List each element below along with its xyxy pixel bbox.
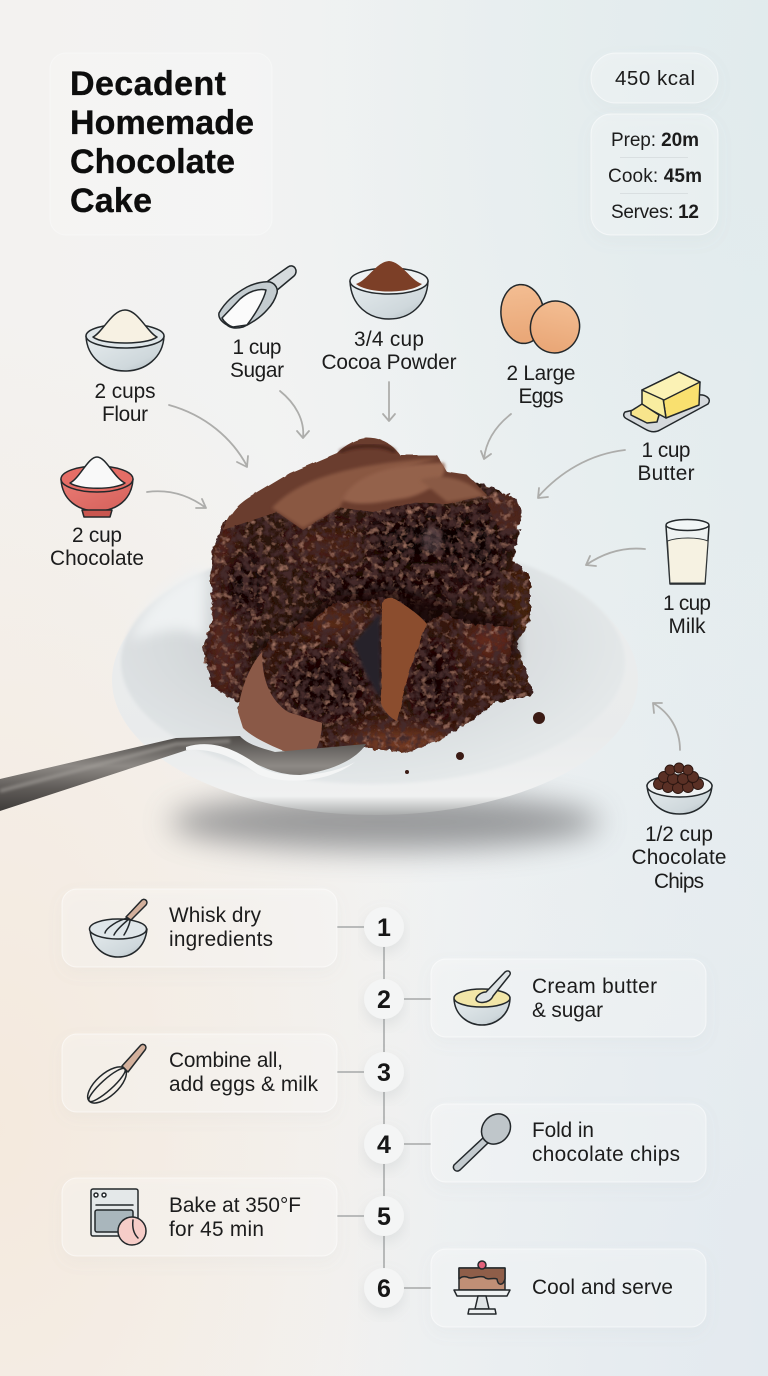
arrow: cocoa to cake xyxy=(383,382,395,421)
icon: two eggs xyxy=(498,282,584,358)
step number 6 xyxy=(364,1268,404,1308)
ingredient: flour: Flour xyxy=(102,403,148,426)
step 5 card: Bake at 350°F xyxy=(169,1194,301,1217)
step number 2 xyxy=(364,979,404,1019)
ingredient: chocolate chips xyxy=(632,763,726,893)
shadow behind bite xyxy=(255,590,515,720)
step 3 card: add eggs & milk xyxy=(169,1073,319,1096)
step 4 card xyxy=(431,1104,706,1182)
icon: whisk in bowl xyxy=(90,899,147,957)
frosting swirl xyxy=(272,458,438,528)
ingredient: chocolate: Chocolate xyxy=(50,547,144,570)
step 2 card: Cream butter xyxy=(532,975,657,998)
crumb highlight xyxy=(422,527,442,553)
arrow: chips to cake xyxy=(653,703,680,750)
icon: bowl of chips xyxy=(647,763,712,814)
step 3 card xyxy=(62,1034,337,1112)
step 3 card: Combine all, xyxy=(169,1049,283,1072)
step number 2: 2 xyxy=(377,986,391,1014)
plate shadow xyxy=(170,794,600,850)
ingredient: chocolate chips: Chocolate xyxy=(632,846,726,869)
arrow: butter to cake xyxy=(538,450,625,498)
icon: spoon xyxy=(453,1108,516,1171)
icon: whisk xyxy=(82,1044,146,1109)
ingredient: chocolate: 2 cup xyxy=(72,524,122,547)
step 6 card xyxy=(431,1249,706,1327)
step 4 card: Fold in xyxy=(532,1119,594,1142)
ingredient: chocolate chips: Chips xyxy=(654,870,704,893)
ingredient: flour: 2 cups xyxy=(94,380,156,403)
icon: sugar scoop xyxy=(219,266,296,328)
ingredient: sugar: Sugar xyxy=(230,359,284,382)
ingredient: chocolate xyxy=(50,457,144,570)
step 2 card: & sugar xyxy=(532,999,603,1022)
frosting top xyxy=(223,438,487,530)
arrow: flour to cake xyxy=(169,405,248,467)
recipe stats panel: Serves: 12 xyxy=(611,202,699,223)
step 6 card: Cool and serve xyxy=(532,1276,673,1299)
calories pill xyxy=(591,53,718,103)
arrow: chocolate to cake xyxy=(147,491,206,508)
fork bite body xyxy=(238,598,515,760)
ingredient: milk: 1 cup xyxy=(663,592,711,615)
recipe stats panel: Prep: 20m xyxy=(611,130,699,151)
ingredient: butter xyxy=(624,372,709,485)
ingredient: butter: Butter xyxy=(638,462,695,485)
ingredient: eggs: 2 Large xyxy=(506,362,576,385)
title panel: Decadent xyxy=(70,65,226,103)
bite caramel layer xyxy=(381,598,427,721)
ingredient: sugar: 1 cup xyxy=(232,336,282,359)
ingredient: eggs: Eggs xyxy=(518,385,564,408)
bite dark layer xyxy=(353,613,381,700)
arrow: eggs to cake xyxy=(481,414,511,459)
ingredient: sugar xyxy=(219,266,296,382)
step 2 card xyxy=(431,959,706,1037)
step number 4: 4 xyxy=(377,1131,391,1159)
crumbs xyxy=(405,712,545,774)
bite frosting side xyxy=(238,652,322,760)
step 1 card: Whisk dry xyxy=(169,904,262,927)
title panel: Cake xyxy=(70,182,152,220)
step number 6: 6 xyxy=(377,1275,391,1303)
timeline connectors xyxy=(337,927,431,1288)
step number 1 xyxy=(364,907,404,947)
step number 5: 5 xyxy=(377,1203,391,1231)
ingredient: milk xyxy=(663,520,711,638)
step number 1: 1 xyxy=(377,914,391,942)
ingredient: milk: Milk xyxy=(668,615,706,638)
title panel xyxy=(50,53,272,235)
step number 3: 3 xyxy=(377,1059,391,1087)
icon: bowl with spoon xyxy=(454,971,510,1025)
ingredient: flour xyxy=(86,310,164,426)
step 5 card: for 45 min xyxy=(169,1218,264,1241)
step 4 card: chocolate chips xyxy=(532,1143,680,1166)
icon: cocoa bowl xyxy=(350,261,428,319)
step number 4 xyxy=(364,1124,404,1164)
step 1 card xyxy=(62,889,337,967)
step 5 card xyxy=(62,1178,337,1256)
icon: cake on stand xyxy=(454,1261,510,1314)
knob on cake corner xyxy=(487,493,521,532)
plate xyxy=(112,540,638,815)
step number 3 xyxy=(364,1052,404,1092)
step number 5 xyxy=(364,1196,404,1236)
cake slice xyxy=(203,438,545,774)
arrow: sugar to cake xyxy=(280,391,309,438)
cake body xyxy=(203,470,540,705)
ingredient: cocoa powder: Cocoa Powder xyxy=(322,351,457,374)
ingredient: cocoa powder xyxy=(322,261,457,374)
arrow: milk to cake xyxy=(586,549,645,566)
icon: flour bowl xyxy=(86,310,164,371)
ingredient: chocolate chips: 1/2 cup xyxy=(645,823,713,846)
title panel: Homemade xyxy=(70,104,254,142)
fork xyxy=(0,736,366,811)
ingredient: eggs xyxy=(498,282,584,408)
ingredient: butter: 1 cup xyxy=(642,439,690,462)
icon: oven with timer xyxy=(91,1189,146,1245)
recipe stats panel: Cook: 45m xyxy=(608,166,702,187)
ingredient: cocoa powder: 3/4 cup xyxy=(354,328,424,351)
calories pill: 450 kcal xyxy=(615,67,695,90)
title panel: Chocolate xyxy=(70,143,235,181)
icon: butter on dish xyxy=(624,372,709,432)
recipe stats panel xyxy=(591,114,718,235)
icon: red bowl xyxy=(61,457,133,517)
icon: glass of milk xyxy=(666,520,709,584)
step 1 card: ingredients xyxy=(169,928,273,951)
